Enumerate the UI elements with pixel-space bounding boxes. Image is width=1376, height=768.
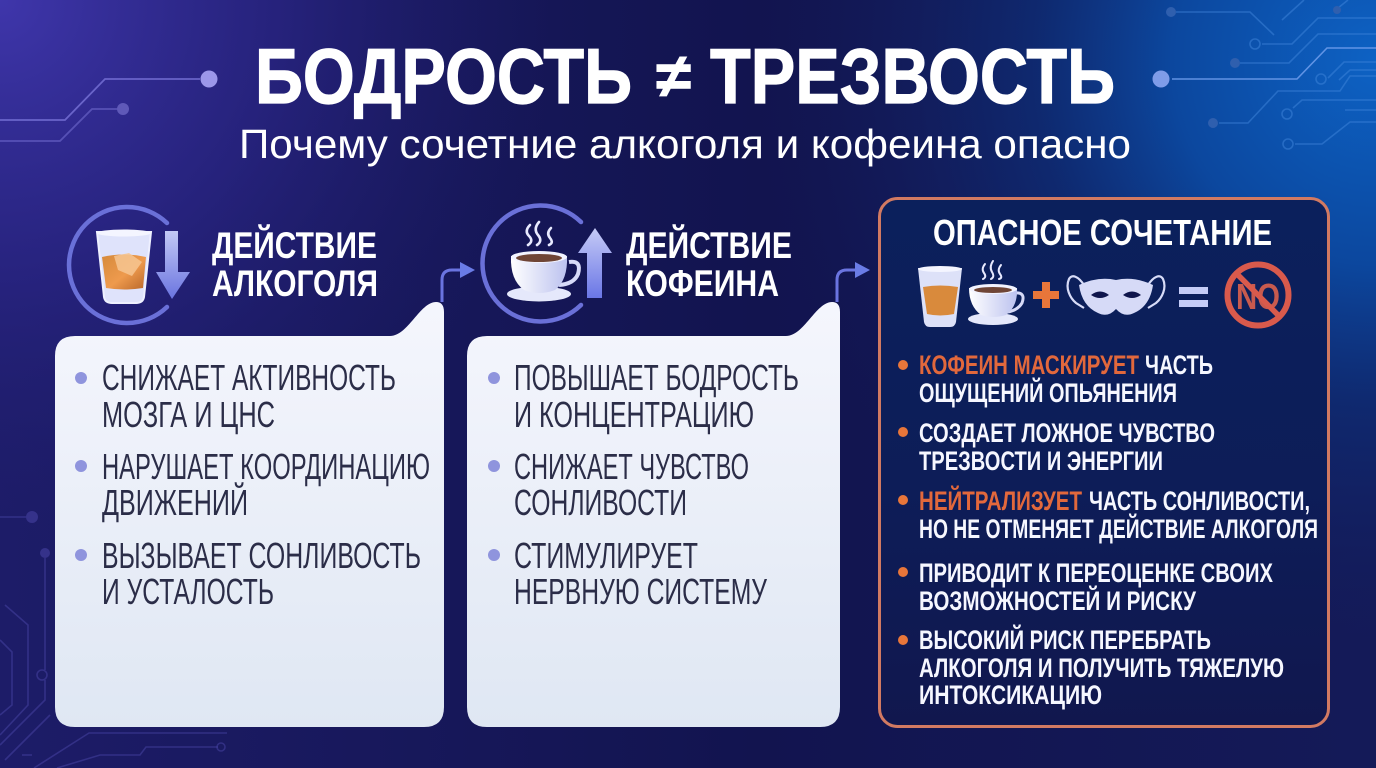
bullet list: combination effects: КОФЕИН МАСКИРУЕТ xyxy=(919,350,1139,380)
panel: alcohol effects xyxy=(55,302,444,727)
icon: glass and cup xyxy=(918,261,1023,327)
icon: equals xyxy=(1179,287,1208,307)
title: ≠ xyxy=(656,42,691,111)
bullet list: alcohol effects: И УСТАЛОСТЬ xyxy=(102,571,274,612)
bullet list: caffeine effects: И КОНЦЕНТРАЦИЮ xyxy=(514,394,754,435)
icon: whisky glass with down arrow xyxy=(69,207,190,323)
heading: caffeine: ДЕЙСТВИЕ xyxy=(626,224,792,266)
circuit pattern: top left xyxy=(0,70,218,141)
heading: alcohol: АЛКОГОЛЯ xyxy=(212,263,378,304)
bullet list: caffeine effects: СТИМУЛИРУЕТ xyxy=(514,535,698,576)
bullet list: caffeine effects: СНИЖАЕТ ЧУВСТВО xyxy=(514,446,749,487)
arrow: caffeine to combination xyxy=(837,262,870,302)
bullet list: combination effects: ВЫСОКИЙ РИСК ПЕРЕБРАТЬ xyxy=(919,624,1211,655)
bullet list: combination effects: ВОЗМОЖНОСТЕЙ И РИСКУ xyxy=(919,585,1197,616)
title: ТРЕЗВОСТЬ xyxy=(710,32,1115,120)
bullet list: alcohol effects: СНИЖАЕТ АКТИВНОСТЬ xyxy=(102,357,396,398)
panel: dangerous combination xyxy=(880,198,1328,726)
icon: mask xyxy=(1068,276,1164,315)
bullet list: combination effects: ОЩУЩЕНИЙ ОПЬЯНЕНИЯ xyxy=(919,377,1177,408)
bullet list: alcohol effects: ВЫЗЫВАЕТ СОНЛИВОСТЬ xyxy=(102,535,421,576)
arrow: alcohol to caffeine xyxy=(442,262,475,302)
bullet list: alcohol effects: НАРУШАЕТ КООРДИНАЦИЮ xyxy=(102,446,430,487)
icon: no sign: NO xyxy=(1236,276,1280,317)
bullet list: alcohol effects xyxy=(75,357,430,612)
bullet list: combination effects: СОЗДАЕТ ЛОЖНОЕ ЧУВСТВО xyxy=(919,418,1215,448)
circuit pattern: bottom left xyxy=(0,511,227,768)
subtitle: Почему сочетние алкоголя и кофеина опасно xyxy=(239,121,1131,167)
icon: plus xyxy=(1033,282,1059,308)
bullet list: caffeine effects: ПОВЫШАЕТ БОДРОСТЬ xyxy=(514,357,799,398)
title: БОДРОСТЬ xyxy=(255,32,632,120)
heading: caffeine: КОФЕИНА xyxy=(626,263,779,304)
bullet list: alcohol effects: МОЗГА И ЦНС xyxy=(102,394,275,435)
bullet list: combination effects: ИНТОКСИКАЦИЮ xyxy=(919,680,1102,710)
bullet list: combination effects: НЕЙТРАЛИЗУЕТ xyxy=(919,485,1082,516)
bullet list: caffeine effects: СОНЛИВОСТИ xyxy=(514,482,687,523)
bullet list: combination effects xyxy=(898,350,1318,710)
bullet list: combination effects: ЧАСТЬ xyxy=(1145,350,1213,380)
bullet list: combination effects: ТРЕЗВОСТИ И ЭНЕРГИИ xyxy=(919,446,1163,476)
bullet list: caffeine effects: НЕРВНУЮ СИСТЕМУ xyxy=(514,571,768,612)
bullet list: alcohol effects: ДВИЖЕНИЙ xyxy=(102,481,248,523)
bullet list: caffeine effects xyxy=(488,357,799,612)
title xyxy=(255,32,1115,120)
circuit pattern: top right xyxy=(1152,0,1376,149)
heading: caffeine xyxy=(626,224,792,304)
heading: dangerous combination: ОПАСНОЕ СОЧЕТАНИЕ xyxy=(933,212,1272,253)
icon: no sign xyxy=(1228,264,1288,326)
heading: alcohol xyxy=(212,224,378,304)
icon: coffee cup with up arrow xyxy=(482,206,612,321)
panel: caffeine effects xyxy=(467,302,840,727)
heading: alcohol: ДЕЙСТВИЕ xyxy=(212,224,377,266)
